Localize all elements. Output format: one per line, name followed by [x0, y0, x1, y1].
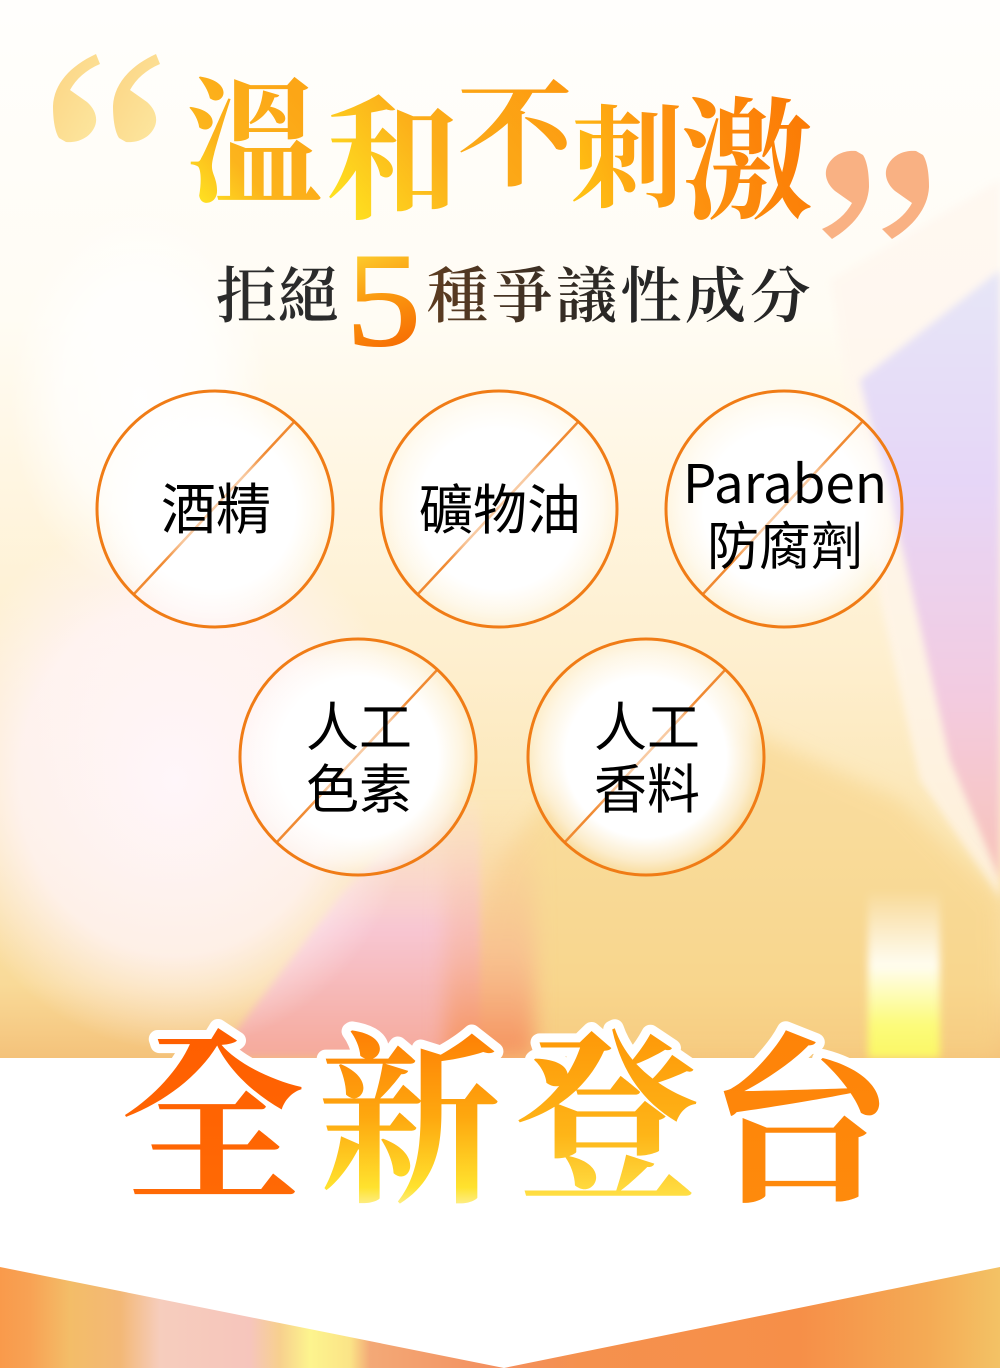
circle: 人工香料 [528, 639, 764, 875]
number 5: 5 [346, 225, 421, 374]
right quote mark [822, 151, 929, 239]
background [0, 0, 1000, 1058]
left quote mark [53, 54, 160, 142]
title: 溫和不刺激: 溫 [186, 34, 322, 230]
circle: 人工色素 [240, 639, 476, 875]
headline: 全新登台: 全 [120, 972, 304, 1237]
circle: 人工色素: 色素 [306, 748, 412, 824]
headline: 全新登台: 台 [708, 975, 898, 1240]
circle: Paraben 防腐劑: 防腐劑 [707, 505, 863, 580]
title: 溫和不刺激: 不 [457, 43, 577, 210]
circle: 礦物油: 礦物油 [419, 466, 581, 545]
circle: Paraben 防腐劑: Paraben [683, 443, 887, 519]
circle: 酒精: 酒精 [161, 465, 271, 545]
headline: 全新登台: 登 [515, 973, 699, 1238]
white band [0, 1058, 1000, 1368]
headline: 全新登台 [120, 972, 898, 1240]
subtitle: 拒絕 5 種爭議性成分: 拒絕 [216, 248, 340, 335]
circle: 人工香料: 香料 [594, 748, 700, 824]
subtitle: 拒絕 5 種爭議性成分: 種爭議性成分 [427, 248, 814, 335]
subtitle: 拒絕 5 種爭議性成分 [216, 225, 814, 374]
circle: 人工香料: 人工 [594, 686, 700, 762]
title: 溫和不刺激: 和 [326, 55, 460, 247]
circle: 礦物油 [381, 391, 617, 627]
circle: Paraben 防腐劑 [666, 391, 902, 627]
title: 溫和不刺激: 刺 [571, 70, 683, 231]
circle: 酒精 [97, 391, 333, 627]
bottom chevron band [0, 1267, 504, 1368]
title: 溫和不刺激: 激 [681, 56, 813, 246]
bottom chevron band right [504, 1267, 1000, 1368]
headline: 全新登台: 新 [318, 975, 502, 1240]
circle: 人工色素: 人工 [306, 686, 412, 762]
title: 溫和不刺激 [186, 34, 813, 247]
